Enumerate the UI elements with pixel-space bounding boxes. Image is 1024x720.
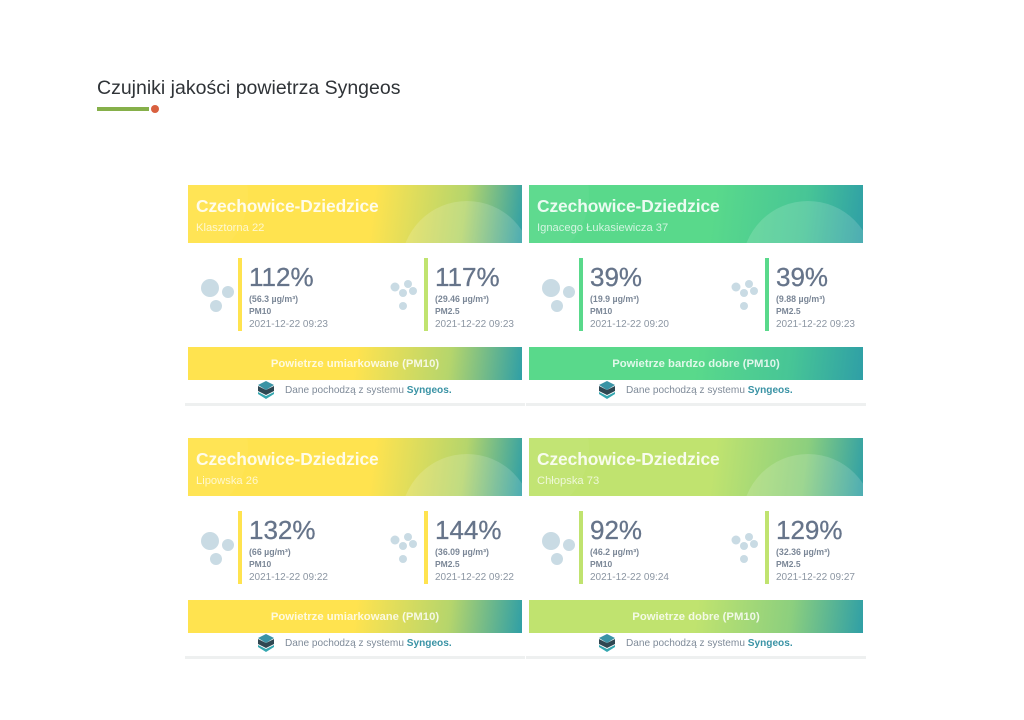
metric: PM10: (56.3 µg/m³) [249, 294, 298, 304]
source note: Dane pochodzą z systemu Syngeos. [626, 638, 793, 649]
status strip: Powietrze bardzo dobre (PM10) [612, 358, 780, 370]
metric: PM10: 39% [590, 262, 642, 292]
metric: PM10: 112% [249, 262, 314, 292]
metric: PM10: 2021-12-22 09:23 [249, 319, 328, 330]
metric: PM10: PM10 [590, 559, 612, 569]
metric: PM2.5: 129% [776, 515, 842, 545]
header banner: Czechowice-Dziedzice [196, 449, 379, 469]
icon: PM2.5 particles [390, 280, 417, 310]
header banner [529, 438, 863, 496]
status strip: Powietrze umiarkowane (PM10) [271, 358, 439, 370]
panel: Ignacego Łukasiewicza 37 [526, 185, 866, 406]
source note [258, 381, 452, 399]
metric: PM2.5: 2021-12-22 09:22 [435, 572, 514, 583]
icon: PM10 particles [201, 279, 234, 312]
metric: PM2.5: 2021-12-22 09:23 [435, 319, 514, 330]
header banner: Lipowska 26 [196, 475, 258, 487]
metric: PM10: 132% [249, 515, 316, 545]
metric: PM2.5: 2021-12-22 09:27 [776, 572, 855, 583]
metric: PM10: PM10 [249, 306, 271, 316]
metric: PM2.5 [424, 511, 514, 584]
metric: PM2.5: (29.46 µg/m³) [435, 294, 489, 304]
metric: PM2.5: PM2.5 [776, 559, 801, 569]
header banner [188, 185, 522, 243]
source note [599, 381, 793, 399]
metric: PM2.5: 39% [776, 262, 828, 292]
header banner: Czechowice-Dziedzice [196, 196, 379, 216]
header banner [529, 185, 863, 243]
metric: PM10: (66 µg/m³) [249, 547, 291, 557]
source note: Dane pochodzą z systemu Syngeos. [626, 385, 793, 396]
metric: PM10 [579, 511, 669, 584]
panel: Klasztorna 22 [185, 185, 525, 406]
metric: PM2.5: 2021-12-22 09:23 [776, 319, 855, 330]
metric: PM10 [579, 258, 669, 331]
metric: PM10: PM10 [590, 306, 612, 316]
header banner: Klasztorna 22 [196, 222, 264, 234]
status strip [188, 600, 522, 633]
metric: PM10: 2021-12-22 09:22 [249, 572, 328, 583]
source note: Dane pochodzą z systemu Syngeos. [285, 638, 452, 649]
title underline with dot [97, 105, 159, 113]
metric: PM10 [238, 258, 328, 331]
icon: PM2.5 particles [732, 280, 758, 310]
header banner [188, 438, 522, 496]
source note: Dane pochodzą z systemu Syngeos. [285, 385, 452, 396]
title: Czujniki jakości powietrza Syngeos [97, 77, 400, 99]
status strip [529, 600, 863, 633]
metric: PM2.5: (36.09 µg/m³) [435, 547, 489, 557]
metric: PM10: 2021-12-22 09:20 [590, 319, 669, 330]
icon: PM10 particles [542, 532, 575, 565]
status strip: Powietrze umiarkowane (PM10) [271, 611, 439, 623]
icon: PM2.5 particles [732, 533, 758, 563]
metric: PM10: (19.9 µg/m³) [590, 294, 639, 304]
metric: PM10: 92% [590, 515, 642, 545]
header banner: Czechowice-Dziedzice [537, 449, 720, 469]
status strip: Powietrze dobre (PM10) [632, 611, 760, 623]
header banner: Czechowice-Dziedzice [537, 196, 720, 216]
metric: PM2.5 [765, 511, 855, 584]
metric: PM2.5: 144% [435, 515, 502, 545]
metric: PM2.5: PM2.5 [435, 306, 460, 316]
metric: PM2.5: (9.88 µg/m³) [776, 294, 825, 304]
icon: PM10 particles [201, 532, 234, 565]
metric: PM2.5 [765, 258, 855, 331]
metric: PM10: (46.2 µg/m³) [590, 547, 639, 557]
metric: PM10: 2021-12-22 09:24 [590, 572, 669, 583]
panel: Chłopska 73 [526, 438, 866, 659]
metric: PM2.5: (32.36 µg/m³) [776, 547, 830, 557]
icon: PM10 particles [542, 279, 575, 312]
metric: PM10 [238, 511, 328, 584]
panel: Lipowska 26 [185, 438, 525, 659]
metric: PM2.5: PM2.5 [435, 559, 460, 569]
metric: PM10: PM10 [249, 559, 271, 569]
source note [599, 634, 793, 652]
source note [258, 634, 452, 652]
header banner: Chłopska 73 [537, 475, 599, 487]
metric: PM2.5: 117% [435, 262, 500, 292]
metric: PM2.5 [424, 258, 514, 331]
metric: PM2.5: PM2.5 [776, 306, 801, 316]
icon: PM2.5 particles [390, 533, 417, 563]
header banner: Ignacego Łukasiewicza 37 [537, 222, 668, 234]
status strip [188, 347, 522, 380]
status strip [529, 347, 863, 380]
